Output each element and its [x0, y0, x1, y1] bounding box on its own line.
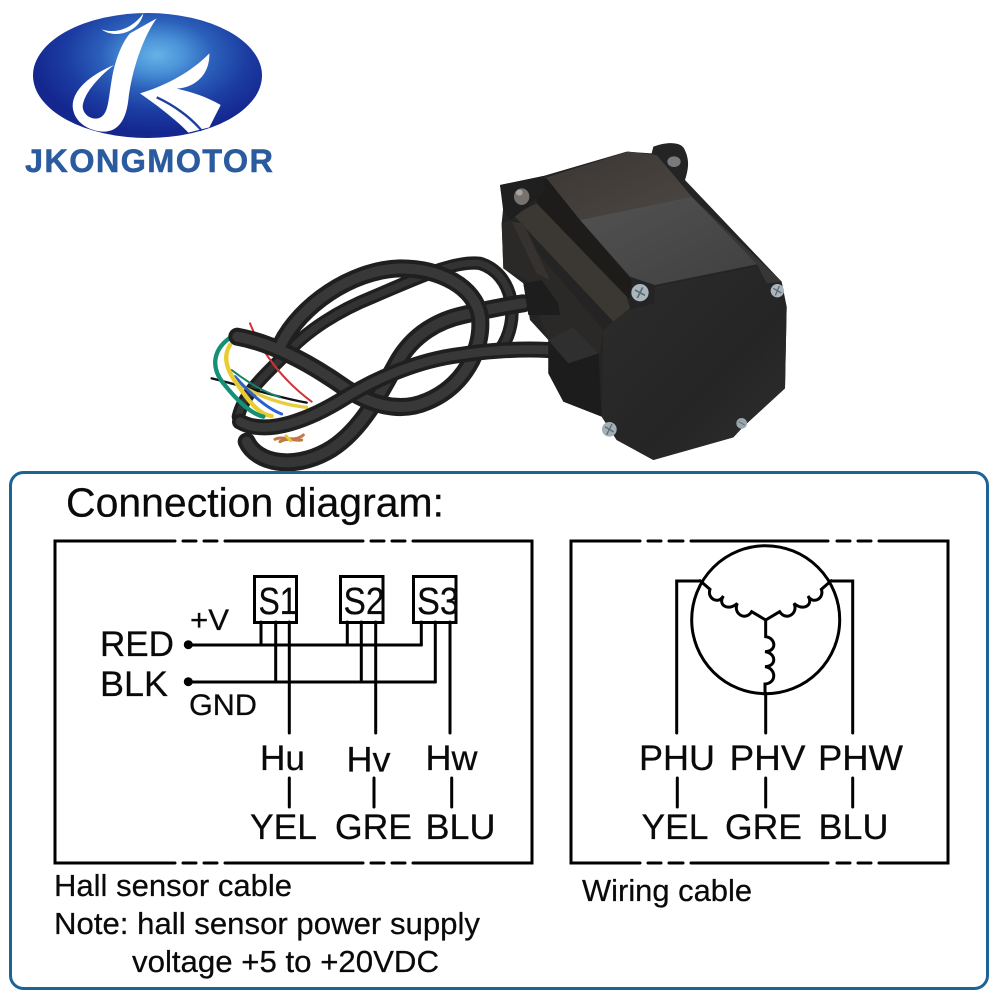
- logo emblem: [33, 13, 262, 138]
- cable upper strand: [240, 350, 548, 427]
- label: PHU: PHU: [639, 739, 715, 778]
- caption: wiring cable: Wiring cable: [582, 873, 752, 908]
- label: YEL hall: YEL: [250, 808, 317, 847]
- label: GRE wiring: GRE: [725, 808, 802, 847]
- label: GND: GND: [189, 689, 257, 722]
- sensor S2: [340, 576, 384, 733]
- rear left flange: [500, 176, 545, 220]
- cable wires: [212, 323, 312, 442]
- label: PHV: PHV: [730, 739, 806, 778]
- sensor S1: [254, 576, 298, 733]
- stator coils: [700, 581, 831, 693]
- left hole: [514, 188, 529, 205]
- product photo: motor body: [500, 143, 787, 460]
- motor silhouette: [500, 143, 787, 460]
- label: Hv: Hv: [346, 740, 391, 780]
- label: YEL wiring: YEL: [642, 808, 708, 847]
- label: Hw: Hw: [426, 739, 478, 778]
- caption: hall sensor cable: Hall sensor cable: [54, 868, 292, 903]
- black ground line: [184, 677, 435, 686]
- cable lower loop: [247, 303, 523, 462]
- screw: top left: [631, 284, 649, 301]
- label: RED: RED: [100, 625, 174, 664]
- label: Hu: Hu: [260, 739, 305, 778]
- side highlight: [512, 222, 550, 280]
- phase wires: [677, 581, 853, 733]
- rear hole: [667, 156, 681, 167]
- cable rear strand: [238, 263, 512, 417]
- dark channel: [537, 178, 632, 298]
- label: GRE hall: GRE: [335, 808, 412, 847]
- logo wordmark: JKONGMOTOR: [25, 143, 273, 179]
- right edge: [692, 197, 782, 283]
- red supply line: [184, 640, 421, 649]
- top brown section: [543, 152, 692, 220]
- panel: hall sensor diagram: [55, 541, 532, 863]
- screw: top right: [771, 284, 784, 297]
- top grey section: [580, 197, 758, 285]
- side ridge: [513, 203, 630, 322]
- cable big loop: [237, 268, 480, 407]
- note: power supply: voltage +5 to +20VDC: [132, 944, 439, 979]
- sensor S2: S2: [344, 581, 384, 623]
- sensor S1: S1: [258, 581, 298, 623]
- heading: connection diagram: Connection diagram:: [66, 480, 444, 526]
- label: BLU hall: BLU: [426, 808, 496, 847]
- screw: bottom right: [736, 418, 747, 429]
- label: +V: +V: [190, 604, 229, 637]
- logo: JKONGMOTOR: [25, 13, 273, 179]
- label: BLU wiring: BLU: [818, 808, 888, 847]
- note: power supply: [54, 906, 481, 979]
- hall box outline: [55, 541, 532, 863]
- lower side shell: [502, 220, 603, 353]
- label leads: [677, 778, 853, 807]
- motor circle: [692, 546, 840, 694]
- label leads: [289, 778, 452, 807]
- panel: connection diagram: [10, 472, 988, 988]
- front face: [602, 267, 787, 460]
- sensor S3: S3: [417, 581, 459, 623]
- winding box outline: [571, 541, 948, 863]
- note: power supply: Note: hall sensor power supply: [54, 906, 481, 941]
- panel: winding diagram: [571, 541, 948, 863]
- lower connector: [548, 327, 602, 417]
- screw: bottom left: [602, 422, 617, 437]
- product photo: motor cable: [212, 263, 548, 462]
- upper connector: [523, 280, 560, 315]
- label: BLK: BLK: [100, 665, 168, 704]
- sensor S3: [414, 576, 459, 733]
- label: PHW: PHW: [818, 739, 903, 778]
